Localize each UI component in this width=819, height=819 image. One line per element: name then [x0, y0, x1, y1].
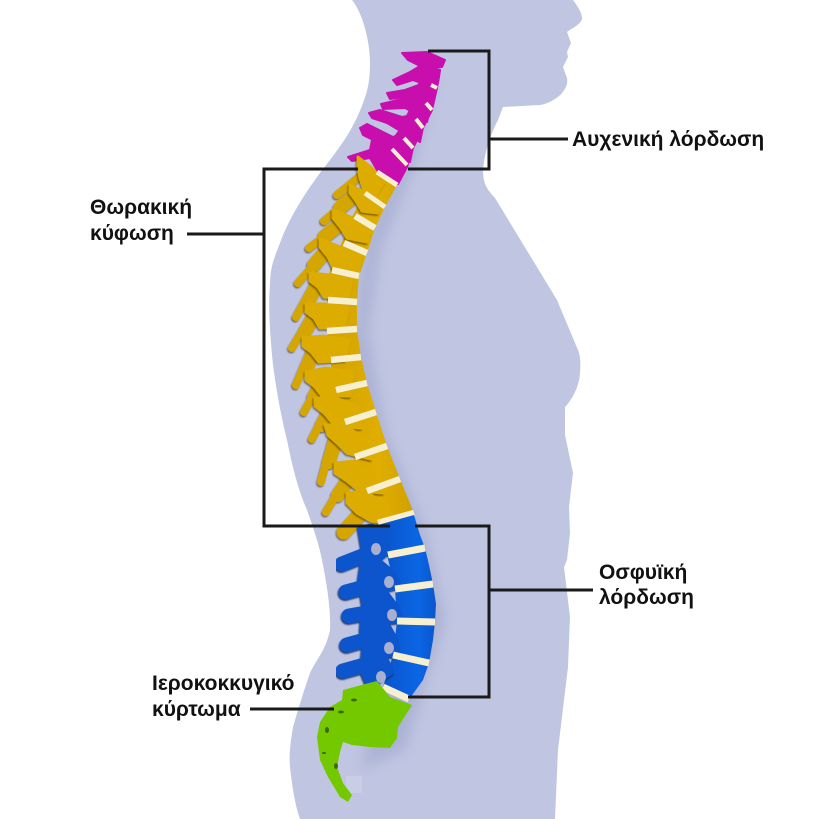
body silhouette — [269, 0, 582, 819]
thoracic discs — [327, 172, 414, 523]
label: lumbar lordosis: λόρδωση — [599, 586, 694, 609]
thoracic vertebral bodies — [327, 172, 414, 523]
lumbar vertebral bodies — [378, 515, 436, 698]
label: cervical lordosis: Αυχενική λόρδωση — [572, 128, 764, 151]
lighter patch near coccyx — [346, 776, 362, 793]
thoracic neural arches — [303, 157, 393, 523]
leader: sacral — [250, 708, 334, 710]
label: sacrococcygeal curve: Ιεροκοκκυγικό — [152, 672, 294, 695]
sacrum foramina — [322, 698, 357, 769]
cervical discs — [392, 85, 437, 165]
cervical lordosis: magenta vertebrae — [348, 52, 445, 184]
label: thoracic kyphosis: Θωρακική — [90, 196, 192, 219]
label: sacrococcygeal curve: κύρτωμα — [152, 698, 241, 721]
bracket: lumbar — [408, 526, 489, 697]
spine cast shadow — [350, 70, 445, 770]
leader: thoracic — [187, 232, 264, 236]
sacrum and coccyx: green — [317, 681, 412, 802]
bracket: cervical — [408, 51, 489, 169]
lumbar articular column and spinous processes — [342, 526, 402, 684]
leader: cervical — [489, 138, 568, 140]
thoracic kyphosis: gold vertebrae — [292, 157, 414, 532]
lumbar discs — [383, 548, 435, 699]
lumbar lordosis: blue vertebrae — [342, 515, 436, 699]
bracket: thoracic — [264, 169, 390, 526]
lumbar pedicle gaps — [371, 543, 397, 683]
thoracic spinous processes — [292, 172, 365, 532]
label: lumbar lordosis: Οσφυϊκή — [599, 561, 687, 584]
label: thoracic kyphosis: κύφωση — [90, 222, 174, 245]
leader: lumbar — [489, 588, 593, 592]
cervical vertebral bodies — [378, 70, 440, 184]
